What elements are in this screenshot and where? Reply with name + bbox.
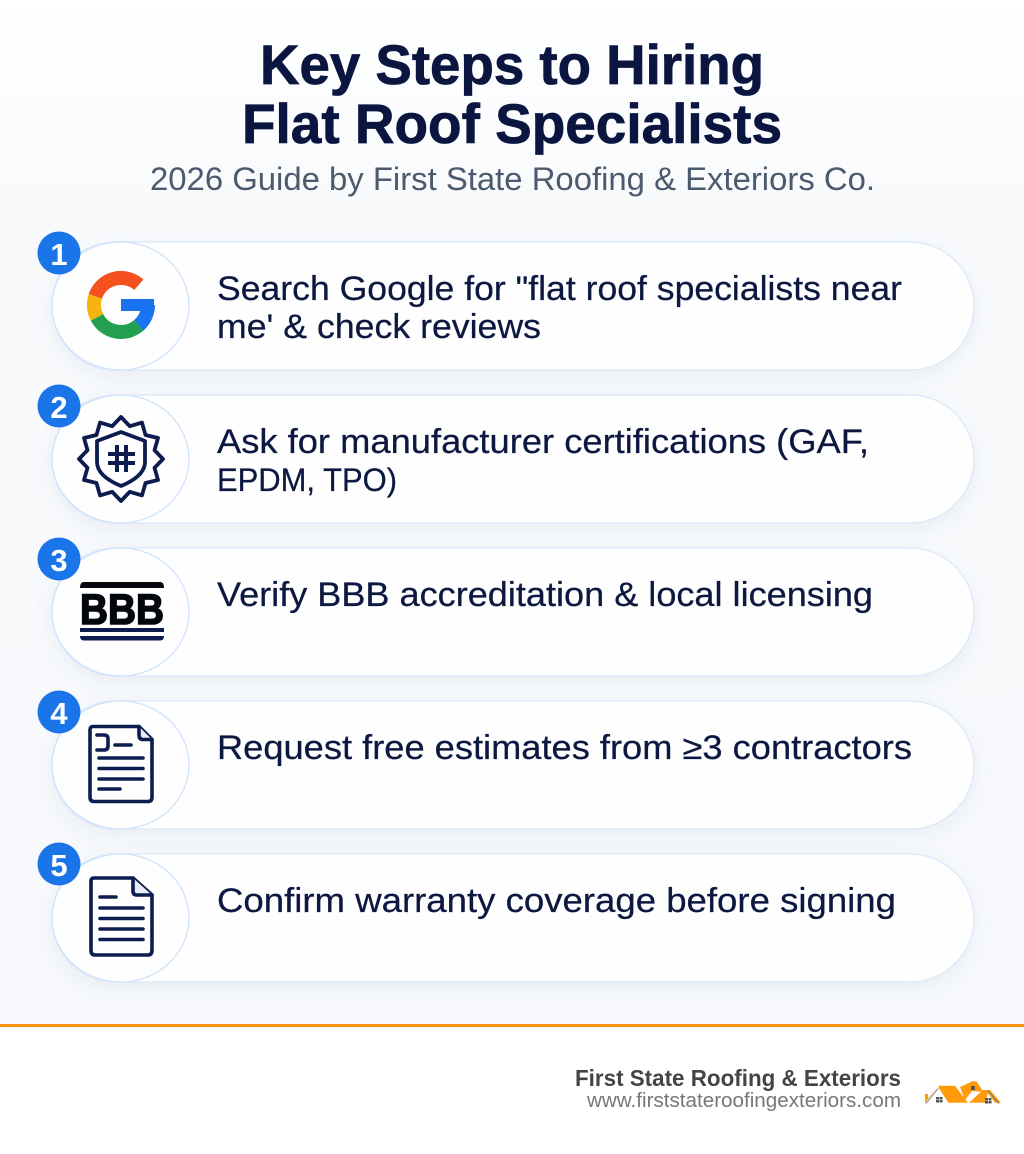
text: step 1: me' & check reviews <box>217 308 541 346</box>
icon: warranty document <box>91 878 152 955</box>
badge: number 1 <box>38 232 80 274</box>
icon: certification shield badge <box>79 417 163 501</box>
text: step 4: Request free estimates from ≥3 contractors <box>217 729 912 767</box>
panel: step 4 <box>38 690 974 829</box>
icon: BBB logo: BBB <box>80 586 164 634</box>
title <box>242 33 782 155</box>
footer company name: First State Roofing & Exteriors <box>575 1065 901 1091</box>
footer website: www.firststateroofingexteriors.com <box>586 1090 901 1112</box>
footer <box>0 1024 1024 1154</box>
badge: number 2 <box>38 384 80 428</box>
badge: number 1: 1 <box>50 237 68 272</box>
text: step 2 <box>217 423 869 498</box>
text: step 3: Verify BBB accreditation & local licensing <box>217 576 873 614</box>
badge: number 4: 4 <box>50 696 68 731</box>
panel: step 3 <box>38 538 974 676</box>
badge: number 2: 2 <box>50 390 68 425</box>
title: Flat Roof Specialists <box>242 92 782 155</box>
text: step 5: Confirm warranty coverage before signing <box>217 882 896 920</box>
badge: number 5 <box>38 842 80 886</box>
title: Key Steps to Hiring <box>260 33 764 96</box>
subtitle: 2026 Guide by First State Roofing & Exteriors Co. <box>150 161 875 197</box>
badge: number 3: 3 <box>50 543 68 578</box>
icon: estimate document <box>90 726 152 802</box>
panel: step 2 <box>38 384 974 523</box>
panel: step 5 <box>38 842 974 982</box>
text: step 1 <box>217 270 902 346</box>
icon: roof logo <box>925 1081 1001 1104</box>
text: step 1: Search Google for "flat roof specialists near <box>217 270 902 308</box>
text: step 2: EPDM, TPO) <box>217 462 397 498</box>
text: step 2: Ask for manufacturer certifications (GAF, <box>217 423 869 461</box>
badge: number 4 <box>38 690 80 734</box>
panel: step 1 <box>38 232 974 370</box>
badge: number 5: 5 <box>50 848 68 883</box>
icon: google logo <box>94 278 154 332</box>
badge: number 3 <box>38 538 80 580</box>
